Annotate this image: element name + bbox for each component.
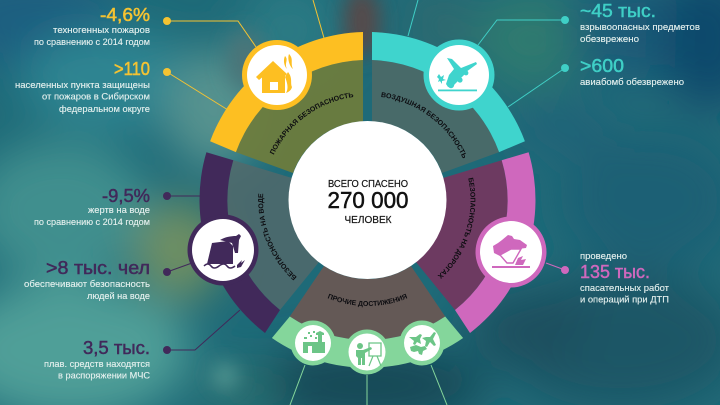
stat: road 135 тыс.: спасательных работ	[580, 283, 669, 293]
sector label: other achievements: ПРОЧИЕ ДОСТИЖЕНИЯ	[328, 294, 408, 308]
sector label: fire safety: ПОЖАРНАЯ БЕЗОПАСНОСТЬ	[270, 92, 354, 155]
stat: fire >110: населенных пункта защищены	[15, 80, 150, 90]
stat: fire -4,6%: -4,6%	[100, 4, 150, 25]
icon: crashing plane	[424, 40, 494, 110]
stat: water 3,5 тыс.: плав. средств находятся	[44, 359, 150, 369]
sector: fire tint	[236, 60, 363, 173]
icon: burning house	[242, 40, 312, 110]
stat: water 3,5 тыс.: 3,5 тыс.	[83, 337, 150, 358]
stat: water >8 тыс. чел: обеспечивают безопасность	[24, 279, 150, 289]
stat: water -9,5%	[34, 185, 171, 227]
stat: air >600: авиабомб обезврежено	[580, 77, 684, 87]
stat: water -9,5%: жертв на воде	[88, 205, 150, 215]
ring: air	[372, 32, 525, 152]
connector lines: other	[290, 365, 447, 405]
stat: water >8 тыс. чел: >8 тыс. чел	[46, 257, 150, 278]
sector: water tint	[227, 160, 319, 310]
sector: road tint	[416, 160, 508, 310]
sector: air tint	[372, 60, 499, 173]
stat: road 135 тыс.: 135 тыс.	[580, 261, 650, 282]
icon: aircraft pair	[400, 320, 444, 366]
icon: capsizing boat	[188, 214, 258, 286]
stat: water 3,5 тыс.: в распоряжении МЧС	[58, 370, 151, 380]
sector label: water safety: БЕЗОПАСНОСТЬ НА ВОДЕ	[258, 194, 297, 280]
stat: water >8 тыс. чел: людей на воде	[87, 291, 150, 301]
stat: fire >110: >110	[114, 58, 150, 79]
stat: fire -4,6%: по сравнению с 2014 годом	[34, 37, 150, 47]
connector lines: fire	[167, 0, 324, 110]
stat: fire -4,6%	[34, 4, 171, 47]
ring: other achievements	[272, 316, 463, 368]
stat: water -9,5%: по сравнению с 2014 годом	[34, 217, 150, 227]
stat: road 135 тыс.	[561, 251, 669, 304]
sector label: air safety: ВОЗДУШНАЯ БЕЗОПАСНОСТЬ	[381, 92, 466, 158]
stat: water 3,5 тыс.	[44, 337, 171, 380]
stat: air >600	[561, 55, 684, 87]
center heading: ВСЕГО СПАСЕНО	[328, 178, 408, 190]
ring: fire	[210, 32, 363, 152]
icon: overturned car	[476, 216, 546, 288]
stat: fire >110: от пожаров в Сибирском	[42, 92, 150, 102]
stat: fire -4,6%: техногенных пожаров	[53, 25, 150, 35]
sector label: road safety: БЕЗОПАСНОСТЬ НА ДОРОГАХ	[438, 178, 476, 279]
stat: air >600: >600	[580, 55, 624, 76]
stat: air ~45 тыс.	[561, 0, 700, 44]
stat: water >8 тыс. чел	[24, 257, 171, 301]
center circle	[288, 121, 446, 279]
icon: factory	[290, 320, 336, 366]
stat: air ~45 тыс.: обезврежено	[580, 34, 639, 44]
stat: fire >110: федеральном округе	[59, 104, 150, 114]
stat: fire >110	[15, 58, 171, 114]
stat: road 135 тыс.: проведено	[580, 251, 627, 261]
sector: other achievements tint	[290, 266, 445, 340]
stat: road 135 тыс.: и операций при ДТП	[580, 294, 669, 304]
center caption: ЧЕЛОВЕК	[344, 214, 392, 226]
icon: instructor at board	[344, 330, 390, 374]
connector line: road	[546, 263, 565, 270]
stat: air ~45 тыс.: взрывоопасных предметов	[580, 22, 700, 32]
connector lines: water	[167, 196, 240, 350]
ring: water	[200, 152, 280, 333]
stat: air ~45 тыс.: ~45 тыс.	[580, 0, 656, 21]
connector lines: air	[408, 0, 565, 107]
stat: water -9,5%: -9,5%	[102, 185, 150, 206]
center number: 270 000	[328, 187, 408, 213]
ring: road	[455, 152, 535, 333]
